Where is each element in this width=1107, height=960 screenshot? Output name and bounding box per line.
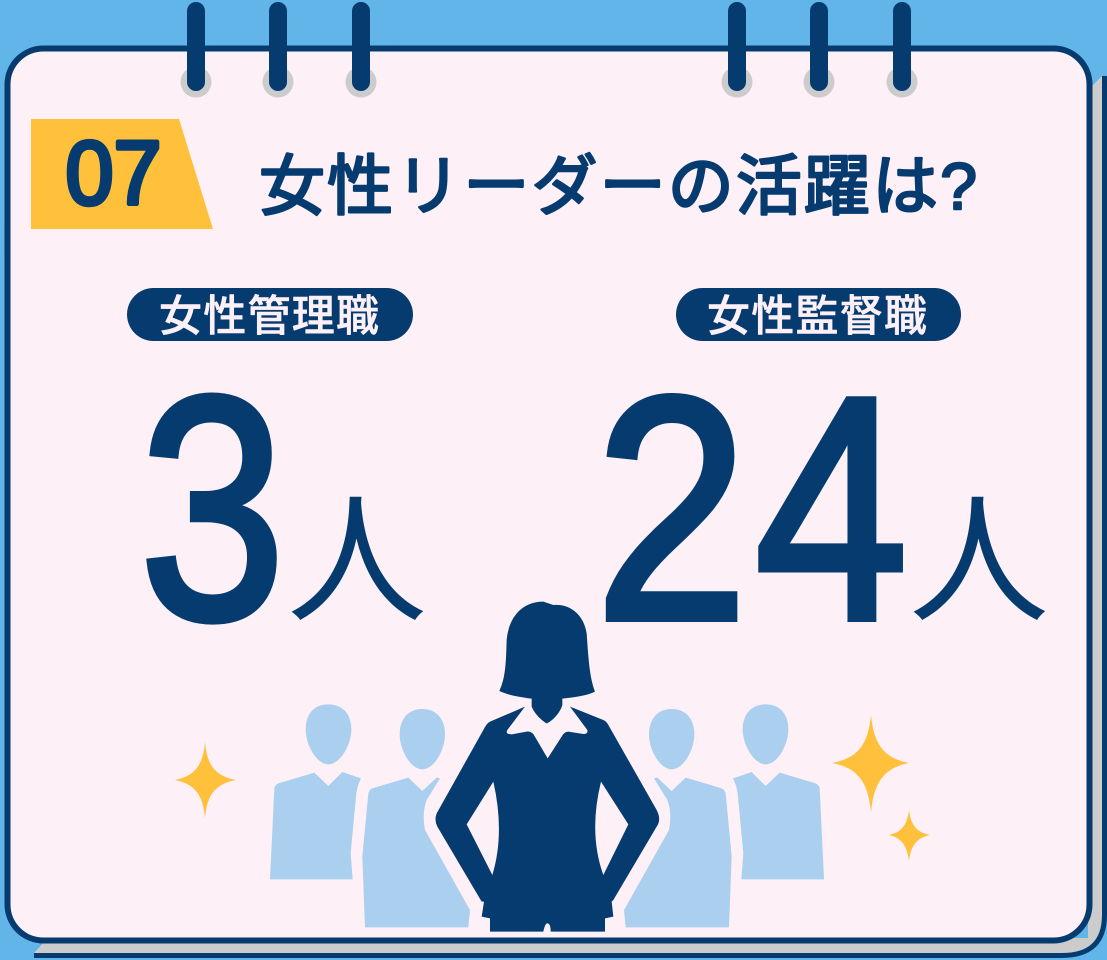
statistic: 24 supervisors: 人 [909,483,1049,640]
number badge 07 [31,119,213,229]
icon: sparkle right small [889,810,930,861]
label pill: female supervisors: 女性監督職 [707,293,927,341]
statistic: 3 managers: 3 [140,330,285,686]
icon: woman leader silhouette [435,602,659,932]
icon: colleagues right [624,704,824,927]
statistic: 24 supervisors: 2 [595,332,748,687]
statistic: 3 managers: 人 [287,483,427,640]
icon: colleagues left [270,704,470,927]
label pill: female managers [127,288,413,341]
binding rings: right group [722,2,918,98]
icon: sparkle left [175,742,236,818]
statistic: 3 managers [140,330,427,686]
title: 女性リーダーの活躍は? [259,149,977,223]
statistic: 24 supervisors [595,332,1049,687]
statistic: 24 supervisors: 4 [755,332,908,687]
number badge 07: 07 [66,124,162,224]
label pill: female managers: 女性管理職 [159,293,379,341]
label pill: female supervisors [676,288,961,341]
icon: sparkle right large [832,715,909,812]
binding rings: left group [180,2,376,98]
